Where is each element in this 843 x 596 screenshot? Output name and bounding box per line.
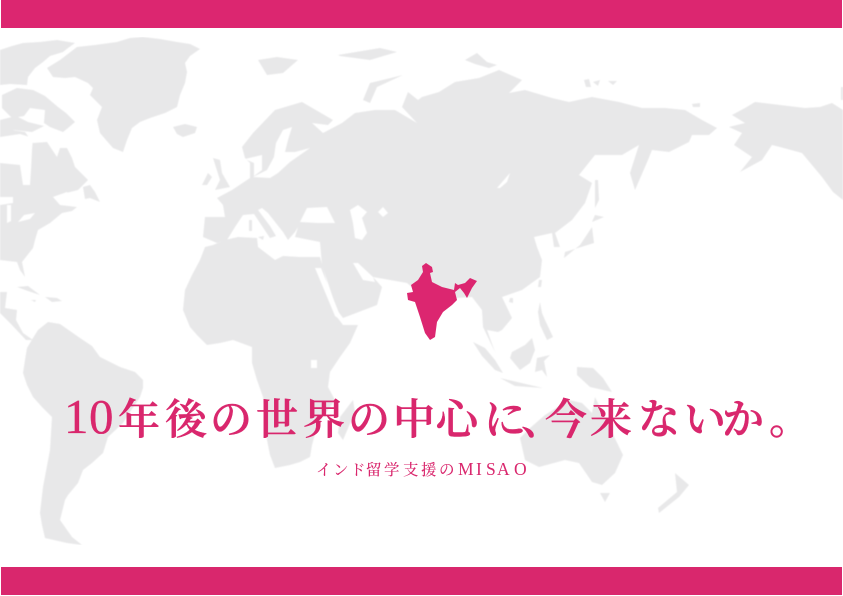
hispaniola [45,297,62,302]
baffin [2,88,75,132]
arctic canada [0,40,75,85]
hudson bay [0,134,33,185]
south america [23,322,143,545]
uk [213,158,230,190]
madagascar [338,400,355,440]
melville peninsula [0,116,44,134]
alaska [729,102,843,200]
subtitle: インド留学支援の [316,461,455,479]
northern islands [258,57,298,75]
black sea [300,207,335,223]
ireland [202,173,212,185]
bottom band [1,567,842,595]
japan [564,227,594,258]
mexico [0,292,33,340]
greenland [47,37,200,152]
africa [183,237,358,468]
eurasia [203,70,717,352]
skagerrak [245,155,262,176]
new zealand [658,473,689,513]
iceland [173,124,197,137]
lake victoria [311,360,317,368]
mediterranean islands [249,220,252,231]
tasmania [600,493,610,502]
title: 10 [64,389,114,444]
persian gulf [353,263,375,282]
jamaica [31,300,36,302]
southeast asia islands [473,342,503,373]
north america [0,130,88,277]
cuba [17,286,40,295]
baltic sea [253,127,310,178]
newfoundland [83,185,100,202]
lake baikal [497,173,510,188]
india highlight [407,263,477,340]
title: 年後の世界の中心に、今来ないか。 [118,397,811,444]
red sea [315,268,362,322]
new guinea [577,367,612,392]
aral sea [378,207,388,217]
st lawrence and great lakes [53,192,77,207]
caspian sea [350,205,367,240]
subtitle: MISAO [458,459,527,479]
australia [520,397,623,485]
top band [1,0,842,28]
